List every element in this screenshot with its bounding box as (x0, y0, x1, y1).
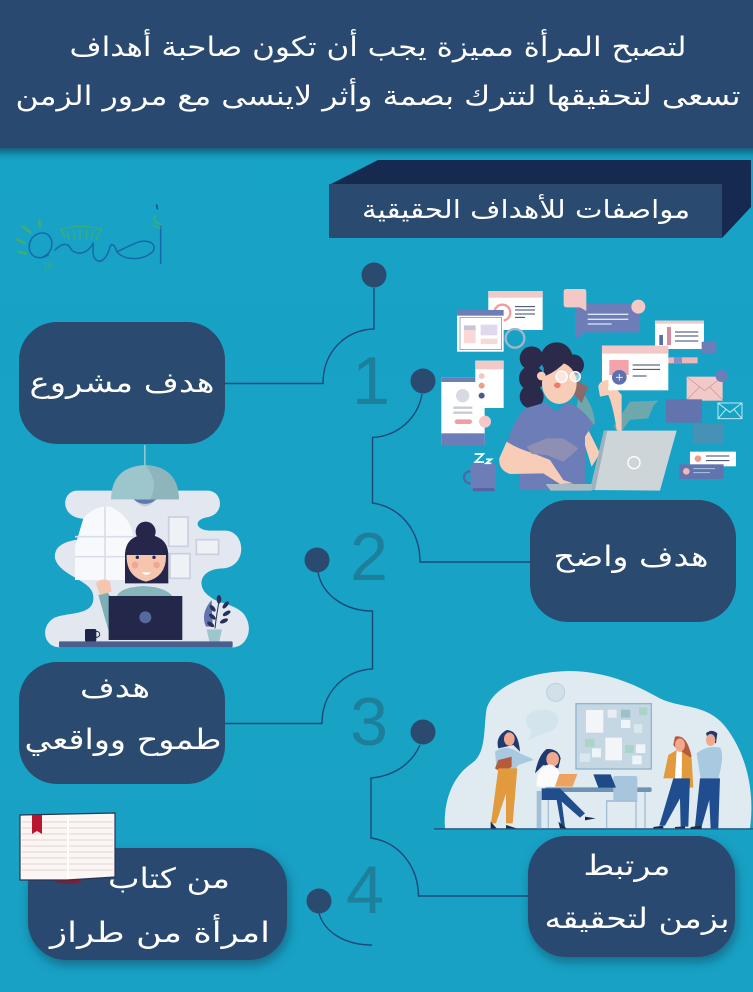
standing woman left (491, 730, 533, 828)
box text line 1: هدف (80, 671, 150, 704)
window (75, 506, 133, 580)
illustration: woman multitasking (441, 289, 742, 491)
header text line 1: لتصبح المرأة مميزة يجب أن تكون صاحبة أهداف (70, 28, 686, 63)
woman (499, 342, 658, 491)
woman (96, 522, 173, 633)
envelopes (666, 370, 742, 444)
connector lines (225, 288, 530, 945)
seated woman (535, 749, 596, 828)
floating card held by hand (598, 346, 668, 397)
box: clear goal (530, 500, 736, 622)
blob (445, 671, 751, 828)
ribbon heading: مواصفات للأهداف الحقيقية (362, 193, 690, 224)
number 3: 3 (350, 684, 388, 760)
picture frames (169, 517, 219, 578)
number 1: 1 (352, 343, 390, 419)
illustration: woman at laptop (45, 445, 249, 647)
notifications (679, 452, 736, 479)
connector dot 2 (410, 368, 436, 394)
speech bubble (526, 710, 558, 740)
laptop (109, 596, 182, 640)
box text line 2: طموح وواقعي (24, 723, 222, 756)
connector dot 4 (410, 720, 436, 744)
box: time bound (528, 836, 735, 957)
plant (204, 595, 231, 641)
box text line 1: مرتبط (584, 849, 670, 882)
ground line (434, 828, 753, 829)
box text line 1: من كتاب (108, 862, 230, 895)
coffee mug (464, 454, 496, 491)
header banner (0, 0, 753, 148)
box: ambitious and realistic (19, 662, 225, 784)
pin board (576, 704, 651, 769)
number 4: 4 (346, 852, 384, 928)
header text line 2: تسعى لتحقيقها لتترك بصمة وأثر لاينسى مع مرور الزمن (16, 77, 740, 112)
lamp (111, 445, 179, 506)
box text line 2: امرأة من طراز (47, 913, 270, 949)
box: source book (28, 848, 287, 960)
illustration: team meeting (434, 671, 753, 829)
laptop (593, 774, 616, 788)
chat bubbles (564, 289, 645, 339)
section ribbon (329, 160, 751, 238)
box text: هدف واضح (554, 540, 708, 573)
laptop (546, 431, 677, 491)
desk (537, 776, 652, 828)
standing man (691, 731, 722, 829)
desk (59, 641, 233, 647)
icon: open book (20, 813, 115, 884)
connector dot 1 (362, 262, 386, 288)
box text: هدف مشروع (30, 366, 214, 399)
logo (17, 205, 161, 270)
window card (457, 310, 504, 352)
colour strip (658, 357, 698, 363)
connector dot 3 (304, 548, 330, 572)
chart card (655, 321, 716, 353)
wall blob (45, 491, 249, 647)
coffee cup (85, 629, 100, 642)
box: clear project goal (19, 322, 225, 444)
standing woman right (653, 736, 693, 828)
connector dot 5 (306, 888, 332, 914)
card with donut (488, 291, 543, 330)
box text line 2: بزمن لتحقيقه (544, 902, 730, 935)
wall clock (547, 683, 565, 701)
number 2: 2 (350, 519, 388, 595)
ring (506, 329, 524, 348)
logo: 18٠ (43, 261, 57, 270)
left cards (441, 361, 504, 445)
